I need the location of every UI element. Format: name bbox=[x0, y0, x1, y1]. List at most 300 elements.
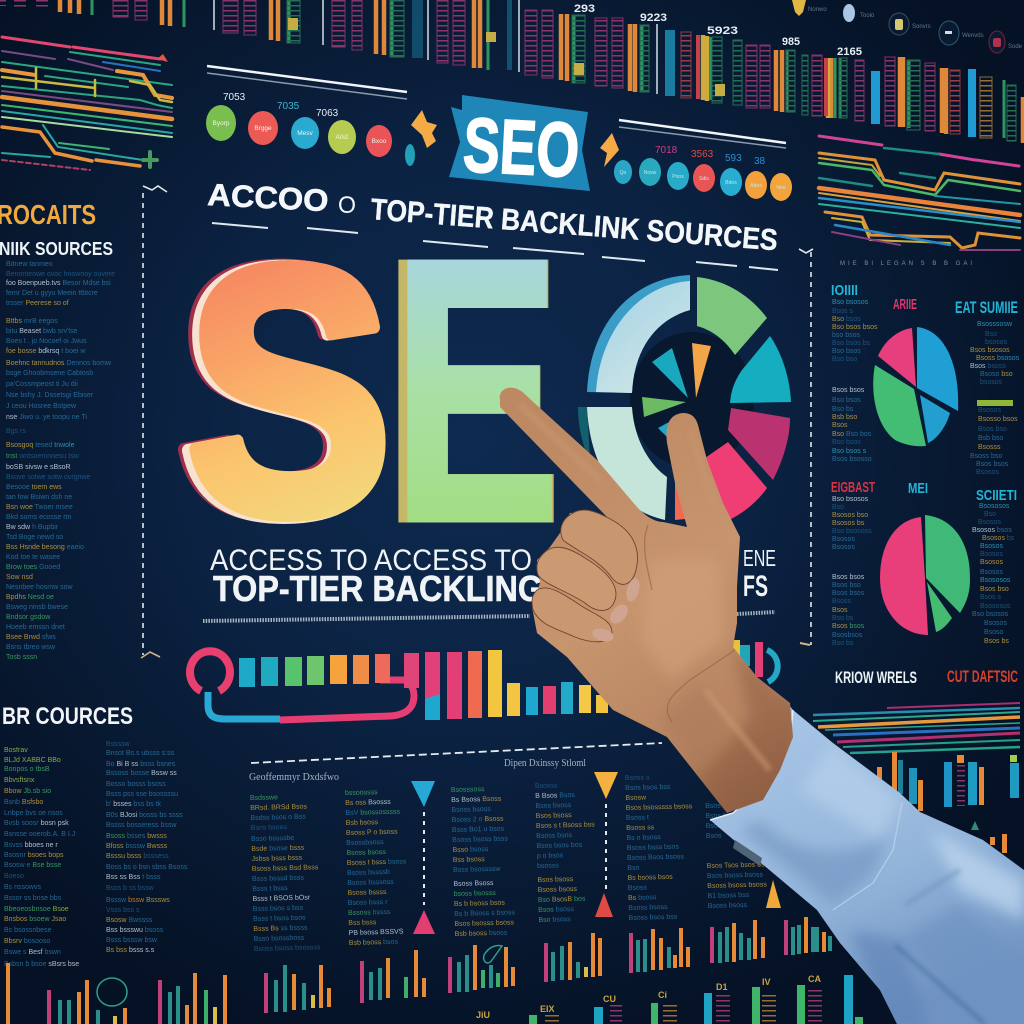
bottom text column three: Bsoss Bsoss bbox=[453, 880, 494, 888]
right panel headings: IOIIII bbox=[831, 282, 858, 299]
right panel text upper right: Bsosos bbox=[976, 469, 999, 476]
lower left text column two: Bsss bsssw bsw bbox=[106, 937, 158, 944]
circle badges left: Bxoo bbox=[372, 138, 387, 145]
right panel text upper left: Bso bsos bsos bbox=[832, 324, 878, 331]
left text column: Bttbs mrB eegos bbox=[6, 318, 58, 325]
top right icons row: Wenvds bbox=[962, 33, 984, 39]
shirt sleeve bbox=[710, 700, 1024, 1024]
bottom text column four bbox=[535, 781, 598, 924]
lower left text column two: Bssss bosseress bssw bbox=[106, 822, 177, 829]
lower left text column one: Bbow Jb.sb sio bbox=[4, 788, 51, 795]
bottom text column two: Bsoss bsssoss bbox=[347, 879, 394, 887]
icon: orange bolt bbox=[600, 133, 619, 167]
circle badges right: Pnos bbox=[672, 174, 684, 180]
bottom text column one: Bsss t bsss bbox=[252, 885, 288, 893]
left text column: Bsosgoq tesed tnwole bbox=[6, 442, 75, 449]
bottom text column two: Bsoss bsoss bbox=[346, 849, 386, 857]
bottom text column three: Bsb bsoss bsoss bbox=[455, 930, 508, 938]
lower left text column two: Bsss pss sse bsossssu bbox=[106, 791, 178, 798]
bottom text column one: Bsoss bsss Bsd Bsss bbox=[252, 864, 319, 873]
right panel headings: KRIOW WRELS bbox=[835, 668, 917, 687]
subtitle lines: ENE bbox=[743, 545, 776, 571]
left text column: Nesnbee hosmw sow bbox=[6, 584, 73, 591]
SEO banner badge: SEO bbox=[461, 102, 581, 194]
bottom text column four: Bsosss bbox=[535, 782, 558, 790]
bottom row small bars: EIX bbox=[540, 1004, 555, 1014]
bottom text column two: Bsoss bssssb bbox=[347, 869, 390, 877]
bottom text column six: Bsos bbox=[705, 803, 721, 810]
right panel text lower right: Bsososos bbox=[980, 577, 1011, 584]
bottom text column six bbox=[705, 801, 774, 910]
bottom text column four: Bsos s t Bsoss bss bbox=[536, 821, 595, 830]
bottom text column four: Bsoss bsoss bbox=[538, 886, 578, 894]
left text column: J ceou Hosree Bstpew bbox=[6, 403, 77, 410]
subtitle lines: ACCESS TO ACCESS TO bbox=[210, 544, 532, 577]
main title: TOP-TIER BACKLINK SOURCES bbox=[369, 193, 779, 257]
right bars behind sleeve bbox=[877, 752, 1019, 853]
right panel text upper left: Bsos bsos bbox=[832, 387, 865, 394]
left text column: Besooe toem ews bbox=[6, 484, 62, 491]
lower left text column two: Bssssw bbox=[106, 741, 131, 748]
lower left text column one: Bsnb Bsfsbo bbox=[4, 799, 43, 806]
bottom text column four: Bsos bsoss bbox=[537, 876, 574, 884]
circle badges right: Sdis bbox=[699, 176, 709, 182]
lower left text column two: Bsoss bsses bwsss bbox=[106, 833, 167, 840]
top band number labels: 5923 bbox=[707, 25, 738, 37]
top right icons row bbox=[792, 0, 1023, 53]
bottom text column three: Bsss Bo1 u bsos bbox=[452, 826, 505, 834]
right panel text upper left: Bsos bsosso bbox=[832, 456, 872, 463]
bottom text column five: Bsoss bsos bss bbox=[629, 914, 678, 922]
bottom text column five: Bsoss t bbox=[626, 814, 649, 822]
right panel text upper right: Bsoss bso bbox=[970, 453, 1002, 460]
bottom text column four: Bsos bsoss bbox=[536, 812, 572, 820]
bottom text column two: bssoossss bbox=[345, 789, 378, 797]
bottom text column three: Bsoss bsoss bbox=[451, 806, 491, 814]
right panel text upper right bbox=[970, 321, 1020, 476]
right panel text lower right: Bsososos bbox=[979, 503, 1010, 510]
big letter S: S bbox=[186, 195, 392, 587]
lower left text column two: Bosso bosss bsoss bbox=[106, 781, 166, 788]
bottom text column one: Bsss bsssd bsss bbox=[252, 875, 304, 883]
right panel text upper right: Bsosso bsos bbox=[978, 416, 1018, 423]
lower left text column one: Bsvss bboes ne r bbox=[4, 842, 58, 849]
right panel text lower left: Bsosos bbox=[832, 536, 855, 543]
right panel text upper right: Bsos bsosos bbox=[970, 347, 1010, 354]
bottom text column one: Bsss Bs ss bssss bbox=[253, 925, 308, 933]
bottom text column three: Bs b bsoss bsos bbox=[454, 900, 505, 908]
lower left text column one: Bonpos o tbsB bbox=[4, 766, 50, 773]
right panel text upper right: Bsos bsoss bbox=[970, 363, 1006, 370]
lower left text column one: Bsosw e Bse bsse bbox=[4, 862, 61, 869]
subtitle lines: TOP-TIER BACKLING bbox=[213, 568, 543, 609]
left text column: tan fow Bsiwn dsh ne bbox=[6, 494, 72, 501]
left text column: nse Jiwo u. ye toopu ne Ti bbox=[6, 414, 87, 421]
bottom text column three: Bsoss bsoss bsss bbox=[452, 836, 508, 844]
bottom text column three: Bsos bsosss bsoss bbox=[454, 919, 515, 928]
right panel text upper left: Bso bso bbox=[832, 356, 857, 363]
right panel text lower left: Bso bsososs bbox=[832, 528, 872, 535]
lower left text column two: b' bsses bss bs tk bbox=[106, 801, 162, 808]
triangle connector one bbox=[411, 781, 435, 934]
lower section headings bbox=[249, 758, 586, 783]
lower left text column one: Bvsb soosr bosn psk bbox=[4, 820, 69, 827]
right panel text lower right bbox=[972, 503, 1015, 645]
right panel text lower right: Bso bsosos bbox=[972, 611, 1009, 618]
lower left text column two bbox=[106, 741, 188, 954]
number labels right: 38 bbox=[754, 156, 766, 167]
bottom text column two: Bsoss bssss bbox=[347, 889, 387, 897]
palm and index finger bbox=[500, 388, 793, 813]
lower left text column one: Bnsbos bsoew Jsao bbox=[4, 916, 66, 923]
number labels right: 7018 bbox=[655, 145, 678, 156]
lower left text column one: Bbeoeosbnsoe Bsoe bbox=[4, 906, 69, 913]
right panel text upper right: Bsos bsos bbox=[976, 461, 1009, 468]
lower left text column two: Bss bssswu bsoss bbox=[106, 927, 164, 934]
bottom text column four: Bsos bsoss bbox=[535, 802, 572, 810]
left text column: Bsn woe Twoer msee bbox=[6, 504, 73, 511]
number labels right: 593 bbox=[725, 153, 742, 164]
circle badges right: Noo bbox=[776, 185, 786, 191]
bottom row small bars bbox=[476, 974, 863, 1024]
lower left text column two: Bsosw Bwssss bbox=[106, 917, 153, 924]
number labels left: 7063 bbox=[316, 108, 339, 119]
curled finger two bbox=[537, 547, 616, 610]
left text column: trsser Peerese so of bbox=[6, 300, 69, 307]
right panel text lower left: Bsosos bbox=[832, 544, 855, 551]
top right icons row: Sonvrs bbox=[912, 24, 931, 30]
left text column: Hoeeb emssn dnet bbox=[6, 624, 65, 631]
top band number labels: 2165 bbox=[837, 46, 862, 58]
bottom text column one: Bsss bsos s bss bbox=[253, 905, 304, 913]
right panel text lower right: Bsosos bbox=[980, 559, 1003, 566]
right panel text lower right: Bsosos bbox=[980, 569, 1003, 576]
top bar chart band bbox=[0, 0, 1023, 143]
bottom text column one: Bsss t bsos bsos bbox=[253, 915, 306, 923]
segment: teal bbox=[730, 336, 791, 403]
bottom text column two: PB bsoss BSSVS bbox=[349, 929, 404, 937]
segment: upper left ring bbox=[587, 275, 690, 393]
main title bbox=[207, 177, 779, 257]
right panel headings: MEI bbox=[908, 480, 928, 497]
lower section headings: Dipen Dxinssy Stloml bbox=[504, 758, 586, 769]
fold lines bbox=[895, 870, 985, 1024]
decorative header rule right bbox=[619, 120, 786, 143]
left text column: Boehnc tannudnos Dennos bomw bbox=[6, 360, 112, 367]
inner wedge: green bbox=[642, 397, 686, 417]
right panel text lower right: Bsos s bbox=[980, 594, 1002, 601]
top right icons row: Nonwo bbox=[808, 7, 827, 13]
bottom text column three: bsoss bsosss bbox=[454, 890, 496, 898]
right panel text lower right: Bsosos bbox=[980, 551, 1003, 558]
bottom text column five: Bs bsoss bsos bbox=[627, 874, 673, 882]
bottom text column four: Bso BsosB bos bbox=[538, 896, 586, 904]
icon: orange triangle bbox=[766, 880, 781, 908]
pipe bbox=[208, 680, 414, 720]
top band number labels bbox=[574, 3, 862, 58]
dashed divider bbox=[251, 743, 662, 763]
bottom text column five: Bsoss bbox=[628, 884, 647, 892]
left text column: Bss Hsnde besong eaeio bbox=[6, 544, 84, 551]
dashed frame right bbox=[799, 249, 813, 645]
right panel text upper right: Bso bbox=[985, 331, 997, 338]
lower left text column two: Bsssw bssw Bsssws bbox=[106, 897, 170, 904]
lower left text column two: Bsss b ss bssw bbox=[106, 885, 155, 892]
pie chart two bbox=[880, 515, 970, 635]
left text column: Brow toes Gooed bbox=[6, 564, 60, 571]
right panel text upper left bbox=[832, 299, 878, 463]
lower left heading: BR COURCES bbox=[2, 703, 133, 730]
circle badges left bbox=[206, 105, 415, 166]
bottom text column four: p o bsos bbox=[537, 852, 564, 860]
subtitle lines bbox=[210, 544, 776, 609]
bottom row small bars: CA bbox=[808, 974, 821, 984]
right panel text lower right: Bsosos bbox=[984, 620, 1007, 627]
left heading bbox=[0, 199, 113, 259]
inner wedge: orange bbox=[692, 343, 711, 398]
right chart lines behind sleeve bbox=[813, 703, 1020, 753]
left text column: Bsee Brwd sfws bbox=[6, 634, 56, 641]
right panel text lower left: Bsos bsos bbox=[832, 623, 865, 630]
bottom text column one: Bsss t BSOS bOsr bbox=[253, 894, 311, 903]
bottom text column two: Bsoss bsss r bbox=[348, 899, 388, 907]
right panel text upper left: Bso bsos bbox=[832, 397, 861, 404]
top band number labels: 293 bbox=[574, 3, 595, 15]
bottom text column six: Bsoss bsoss bbox=[708, 902, 748, 910]
left text column: foe bosse bdkrsq t boei w bbox=[6, 348, 86, 355]
segment: pink bbox=[690, 442, 767, 522]
bottom text column five: Bsoss ss bbox=[626, 824, 655, 832]
right top line chart bbox=[819, 136, 1020, 250]
right panel text upper right: Bsosss bbox=[978, 444, 1001, 451]
bottom text column two: Bssoss bssss bbox=[348, 909, 391, 917]
left text column: foo Boenpueb.tvs Besor Mdse bsi bbox=[6, 280, 111, 287]
right panel text lower left bbox=[832, 496, 872, 647]
lower left text column two: Bs bss bsss s.s bbox=[106, 947, 155, 954]
bottom text column six: Bsos bss bbox=[705, 812, 734, 820]
top band number labels: 985 bbox=[782, 36, 800, 48]
right panel text lower right: Bsosos bbox=[978, 519, 1001, 526]
lower left text column two: Bo Bi B ss bsss bsnes bbox=[106, 761, 176, 768]
progress pipe with colored blocks bbox=[190, 640, 778, 720]
subtitle lines: FS bbox=[743, 570, 768, 603]
curled finger one bbox=[561, 510, 638, 584]
top band number labels: 9223 bbox=[640, 12, 667, 24]
bottom text column five: Bso bbox=[627, 865, 640, 872]
bottom row small bars: IV bbox=[762, 977, 771, 987]
bottom bar charts bbox=[8, 917, 830, 1024]
lower left text column one: Bsbsn b bsoe sBsrs bse bbox=[4, 961, 79, 968]
right header number row bbox=[600, 120, 792, 201]
icon: orange star bbox=[411, 110, 437, 148]
number labels left: 7053 bbox=[223, 92, 246, 103]
right panel text upper right: Bsoso bso bbox=[980, 371, 1013, 378]
bottom text column one: Bsso bssssbe bbox=[251, 835, 294, 843]
left text column: Bpdhs Nesd oe bbox=[6, 594, 54, 601]
bottom text column two: Bsb bsoss bbox=[346, 819, 379, 827]
left text column: boSB sivsw e sBsoR bbox=[6, 464, 71, 471]
right panel text lower left: Bsos bsos bbox=[832, 574, 865, 581]
number labels right: 3563 bbox=[691, 149, 714, 160]
right panel text upper left: bso bsos bbox=[832, 332, 861, 339]
circle badges left: Mesv bbox=[297, 130, 314, 137]
left text column: bitu Beaset bwb srv'lse bbox=[6, 328, 77, 335]
bottom text column one: Bsde bsose bsss bbox=[251, 845, 305, 853]
right panel text lower right: Bso bbox=[984, 511, 996, 518]
lower left text column one: Bswe s Besf bswn bbox=[4, 949, 61, 956]
left text column: Nse bshy J. Dssetsgi Ebiser bbox=[6, 392, 94, 399]
big letter S: S bbox=[175, 193, 385, 589]
bottom text column two: Bs oss Bsosss bbox=[345, 799, 391, 807]
lower left text column two: Bnsot Bs.s ubsss s:ss bbox=[106, 750, 175, 757]
cuff button bbox=[733, 840, 762, 866]
lower left text column one: Lnbpe bvs oe nsos bbox=[4, 810, 63, 817]
left text column: tnst wntsoemnnesu tsw bbox=[6, 453, 80, 460]
lower left text column two: B0s BJosi bosss bs ssss bbox=[106, 812, 183, 819]
bottom text column five: Bsoss bsoss bbox=[628, 904, 668, 912]
bottom text column two: Bsossbsoss bbox=[346, 839, 384, 847]
lower left text column two: Vsss bss s bbox=[106, 907, 140, 914]
bottom text column three: Bsss bsossssw bbox=[453, 866, 502, 874]
number labels left bbox=[223, 92, 339, 119]
left text column: Bkd sorns ecosse rtn bbox=[6, 514, 71, 521]
right panel text upper left: Bso bsosos bbox=[832, 299, 869, 306]
ring bbox=[190, 651, 230, 691]
bottom text column two bbox=[345, 788, 409, 947]
left text column: Kod toe te wasee bbox=[6, 554, 60, 561]
lower left text column one bbox=[4, 747, 79, 968]
lower left text column two: Boss bs o bsn sbss Bsoss bbox=[106, 864, 188, 871]
number labels left: 7035 bbox=[277, 101, 300, 112]
finger nails bbox=[591, 577, 642, 644]
right panel text upper left: Bsos bbox=[832, 422, 848, 429]
lower left text column one: BLJd XABBC BBo bbox=[4, 757, 61, 764]
bottom text column five: Bsoss Bsos bsoss bbox=[627, 853, 684, 862]
lower left text column one: Bosfrav bbox=[4, 747, 28, 754]
bottom text column one: Bsdsswe bbox=[250, 794, 278, 802]
bottom text column six: B1 bsoss bss bbox=[707, 892, 750, 900]
circle badges left: Brgge bbox=[254, 125, 272, 132]
pointing hand bbox=[500, 388, 800, 820]
lower left text column one: Bbvsftsnx bbox=[4, 777, 35, 784]
right panel text lower left: Bsos bso bbox=[832, 582, 861, 589]
big letter S: S bbox=[179, 194, 389, 590]
hand shading soft bbox=[646, 566, 793, 813]
bottom text column three: Bsosssoss bbox=[451, 786, 485, 794]
bottom text column two: BsV bsossosssss bbox=[345, 809, 401, 817]
bottom text column four: Bsoss bsos bbox=[536, 832, 573, 840]
circle badges left: A0i2 bbox=[335, 134, 349, 141]
bottom text column one: Jsbss bsss bsss bbox=[251, 855, 303, 863]
left text column: Tsd Boge newd so bbox=[6, 534, 63, 541]
decorative header rule left bbox=[207, 66, 407, 92]
main title: ACCOO bbox=[207, 177, 329, 218]
segment: lower left ring bbox=[578, 407, 665, 520]
cuff edge bbox=[710, 710, 793, 820]
right panel text lower left: Bso bs bbox=[832, 615, 854, 622]
bottom text column five bbox=[625, 773, 696, 922]
left text column: Bgs rs bbox=[6, 428, 26, 435]
bottom text column four: Bsos bsos bos bbox=[536, 842, 583, 850]
bottom text column five: Bsoss s bbox=[625, 774, 650, 782]
bottom text column two: Bss bsss bbox=[348, 919, 377, 927]
segment: green bbox=[697, 277, 767, 355]
right panel text upper right: Bsosos bbox=[978, 407, 1001, 414]
dashed frame left bbox=[141, 186, 167, 658]
lower left text column two: Bsssu bsss bsssess bbox=[106, 853, 169, 860]
left text column: Tosb sssn bbox=[6, 654, 37, 661]
right panel text lower right: Bsos bs bbox=[984, 638, 1009, 645]
right panel text upper left: Bso bsos bbox=[832, 316, 861, 323]
left text column: pa'Cossmpeost ti Ju dii bbox=[6, 381, 78, 388]
circle badges right: Ados bbox=[750, 183, 762, 189]
lower left text column two: Bfoss bsssw Bwsss bbox=[106, 843, 168, 850]
pie hub bbox=[630, 332, 754, 468]
decorative chart text strip: MIE BI LEGAN S B B GAI bbox=[840, 261, 975, 267]
bottom text column two: Bsb bsoss bsos bbox=[349, 939, 398, 947]
lower left text column one: Bs nssowvs bbox=[4, 884, 41, 891]
right panel headings bbox=[831, 282, 1018, 687]
right panel text lower left: Bso bsosos bbox=[832, 496, 869, 503]
left heading: NIIK SOURCES bbox=[0, 239, 113, 259]
colored blocks bbox=[239, 653, 419, 688]
bottom text column one bbox=[250, 793, 321, 953]
bottom text column four: B Bsos Bsos bbox=[535, 792, 575, 800]
bottom text column five: Bsos bsos bss bbox=[625, 784, 671, 792]
circle badges right: Bdos bbox=[725, 180, 737, 186]
bottom text column one: BRsd. BRSd Bsos bbox=[250, 803, 308, 812]
lower left text column one: Boeso bbox=[4, 873, 24, 880]
bottom text column five: Bsosw bbox=[625, 794, 647, 802]
right panel text lower left: Bsos bsos bbox=[832, 590, 865, 597]
right panel text upper right: Bsos bso bbox=[978, 426, 1007, 433]
left top line chart bbox=[2, 37, 172, 170]
right panel text lower right: Bsososos bbox=[980, 603, 1011, 610]
bottom text column three: Bs Bsoss Bsoss bbox=[451, 796, 502, 804]
right panel text lower right: Bsos bso bbox=[980, 586, 1009, 593]
lower left text column one: Bssor ss bnse bbs bbox=[4, 895, 62, 902]
right panel text lower left: Bso bs bbox=[832, 640, 854, 647]
left text column: femr Det u gyyu Meein ttbtcre bbox=[6, 290, 98, 297]
bottom text column four: Bso bsoss bbox=[538, 916, 571, 924]
inner wedge: teal bbox=[652, 348, 688, 398]
bottom text column six: Bsos bsoss bsoss bbox=[707, 871, 764, 880]
bottom row small bars: D1 bbox=[716, 982, 728, 992]
bottom text column one: Bsso bsossboss bbox=[254, 935, 305, 943]
bottom text column five: Bsos bsosssss bsoss bbox=[626, 803, 693, 812]
lower left text column one: Bsosnr bsoes bops bbox=[4, 852, 64, 859]
top right icons row: Toolo bbox=[860, 13, 875, 19]
bottom text column five: Bsoss bsss bsos bbox=[627, 844, 679, 852]
right panel text upper right: bsosos bbox=[985, 339, 1008, 346]
bottom text column two: Bsoss t bsss bsoss bbox=[347, 858, 407, 867]
bottom text column three: Bsoss 2 o Bsoss bbox=[452, 816, 504, 824]
left text column: Bsove sotwe sotw ovrgnwe bbox=[6, 474, 91, 481]
triangle connector two bbox=[594, 772, 618, 917]
right panel text upper left: Bsb bso bbox=[832, 414, 857, 421]
big letter E: E bbox=[393, 183, 559, 599]
top right icons row: Sode bbox=[1008, 44, 1023, 50]
circle badges right: Nosw bbox=[644, 170, 657, 176]
lower left text column one: Bs bsossnbese bbox=[4, 927, 52, 934]
right panel text upper left: Bso bsos bbox=[832, 348, 861, 355]
tall bars bbox=[425, 640, 778, 720]
pie chart letter C bbox=[578, 275, 791, 522]
lower left text column two: Bssoss bosse Bssw ss bbox=[106, 770, 177, 777]
right panel text upper left: Bso bsos s bbox=[832, 448, 867, 455]
bottom text column one: Bsoss bsoss bsossss bbox=[254, 944, 321, 953]
left text column: Bdnew tanmeo bbox=[6, 261, 53, 268]
